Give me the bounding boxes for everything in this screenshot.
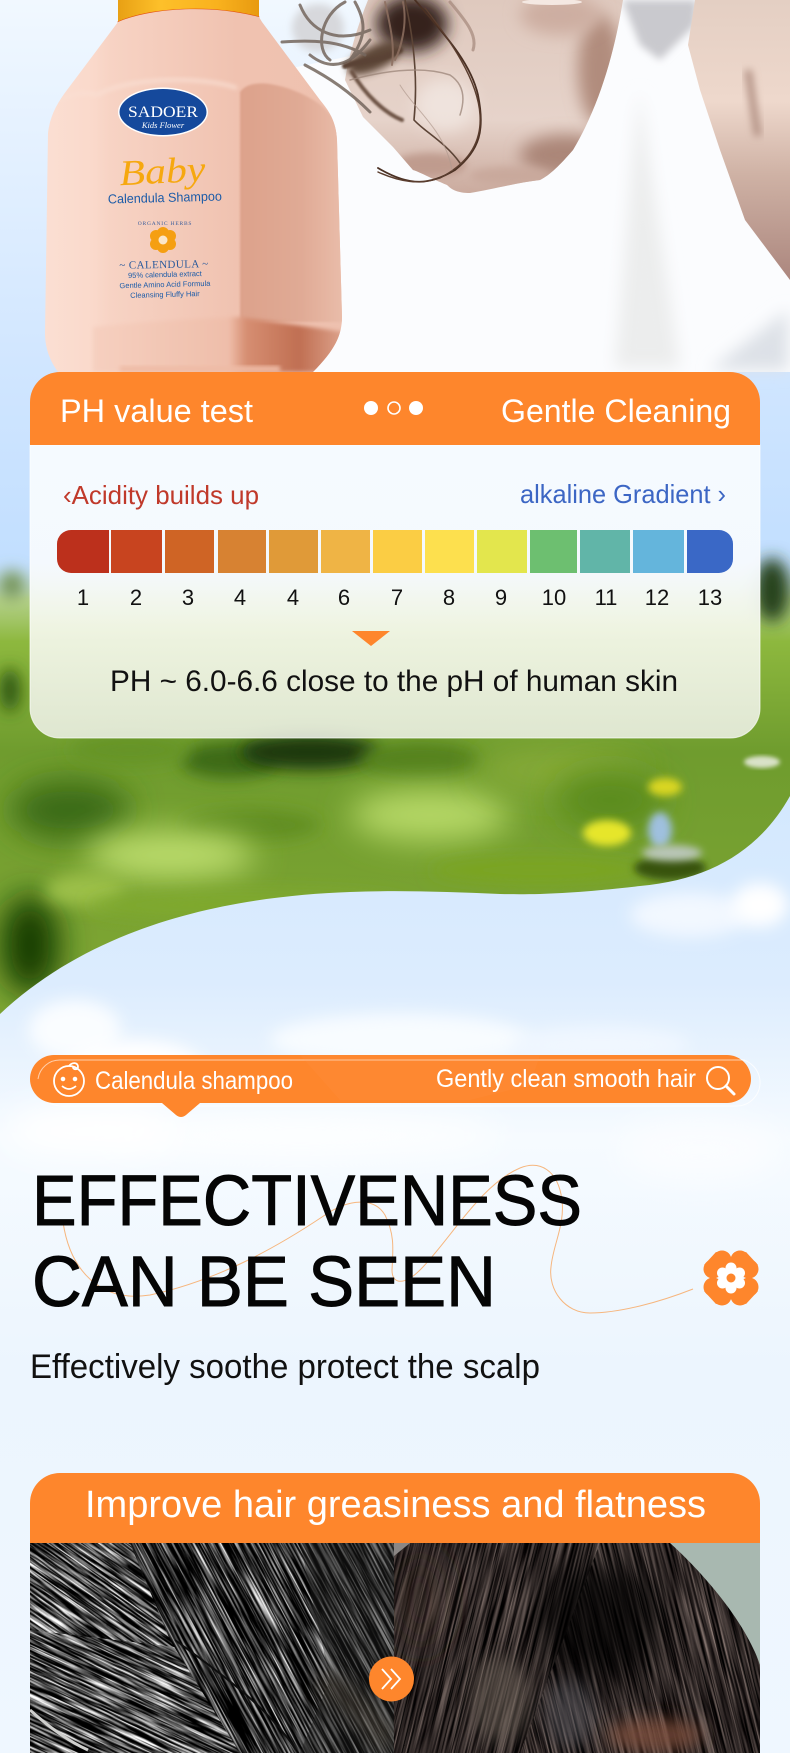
bottle label text: 95% calendula extract xyxy=(128,269,203,280)
panel header xyxy=(30,372,760,445)
banner pill xyxy=(30,1055,760,1117)
product: shampoo bottle xyxy=(40,0,350,372)
panel header xyxy=(30,1473,760,1543)
light wall corner xyxy=(670,1543,760,1665)
subtitle: Effectively soothe protect the scalp xyxy=(30,1348,540,1386)
pH scale numbers xyxy=(77,585,722,610)
bottle flower xyxy=(150,227,176,253)
bottle label text: ORGANIC HERBS xyxy=(138,221,192,227)
panel: PH value test xyxy=(30,372,760,738)
bottle cap xyxy=(118,0,259,22)
pH scale numbers: 7 xyxy=(391,585,403,610)
header right text: Gentle Cleaning xyxy=(501,393,731,429)
bottle label text: Cleansing Fluffy Hair xyxy=(130,289,200,300)
pH scale numbers: 8 xyxy=(443,585,455,610)
background: lower sky with wave edge and clouds xyxy=(0,790,790,1753)
chin xyxy=(522,0,582,5)
pointer triangle xyxy=(352,631,390,646)
banner right text: Gently clean smooth hair xyxy=(436,1065,696,1093)
photo: clean hair after xyxy=(394,1543,760,1753)
pH scale numbers: 10 xyxy=(542,585,566,610)
shirt folds xyxy=(615,0,788,370)
heading: EFFECTIVENESS xyxy=(32,1162,582,1241)
background: upper sky xyxy=(0,0,790,640)
photo: woman in white shirt xyxy=(282,0,790,372)
pH scale numbers: 12 xyxy=(645,585,669,610)
pH scale numbers: 2 xyxy=(130,585,142,610)
icon: baby face xyxy=(54,1063,84,1096)
acidity label: ‹Acidity builds up xyxy=(63,480,259,510)
hair xyxy=(282,0,481,182)
bottle label text: Calendula Shampoo xyxy=(108,189,222,206)
banner left text: Calendula shampoo xyxy=(95,1067,293,1095)
bottle label text: ~ CALENDULA ~ xyxy=(119,258,209,272)
alkaline label: alkaline Gradient › xyxy=(520,479,726,509)
panel: before and after hair xyxy=(30,1473,760,1753)
neck skin xyxy=(345,0,623,193)
background: blurred grass field xyxy=(0,558,790,1040)
pill shape with tail xyxy=(30,1055,751,1117)
bottle body xyxy=(40,0,350,372)
pH scale numbers: 4 xyxy=(234,585,246,610)
decorative hair line xyxy=(63,1165,693,1313)
pH scale numbers: 6 xyxy=(338,585,350,610)
pH scale numbers: 11 xyxy=(595,585,617,610)
pH scale numbers: 1 xyxy=(77,585,89,610)
pH scale numbers: 4 xyxy=(287,585,299,610)
header title: PH value test xyxy=(60,393,253,429)
pH scale numbers: 13 xyxy=(698,585,722,610)
arrow badge xyxy=(369,1656,414,1702)
logo oval: Kids Flower xyxy=(141,120,185,130)
panel heading: Improve hair greasiness and flatness xyxy=(85,1484,706,1526)
bottle label text: Baby xyxy=(118,149,206,193)
pH scale numbers: 9 xyxy=(495,585,507,610)
shirt xyxy=(292,0,790,372)
bottle label text: Gentle Amino Acid Formula xyxy=(119,279,211,290)
pH scale numbers: 3 xyxy=(182,585,194,610)
icon: magnifier xyxy=(707,1067,734,1094)
heading: CAN BE SEEN xyxy=(32,1243,496,1322)
heading xyxy=(32,1162,582,1322)
panel body xyxy=(30,445,760,738)
logo oval: SADOER xyxy=(128,104,198,121)
right arm xyxy=(688,0,790,280)
logo oval xyxy=(118,88,208,136)
photo: greasy hair before xyxy=(30,1543,394,1753)
cap band xyxy=(118,10,259,23)
icon: orange flower xyxy=(704,1250,758,1306)
header dots xyxy=(364,401,423,415)
pH colour scale xyxy=(57,530,733,573)
pH statement: PH ~ 6.0-6.6 close to the pH of human skin xyxy=(110,665,678,698)
bottle label text xyxy=(108,149,222,300)
